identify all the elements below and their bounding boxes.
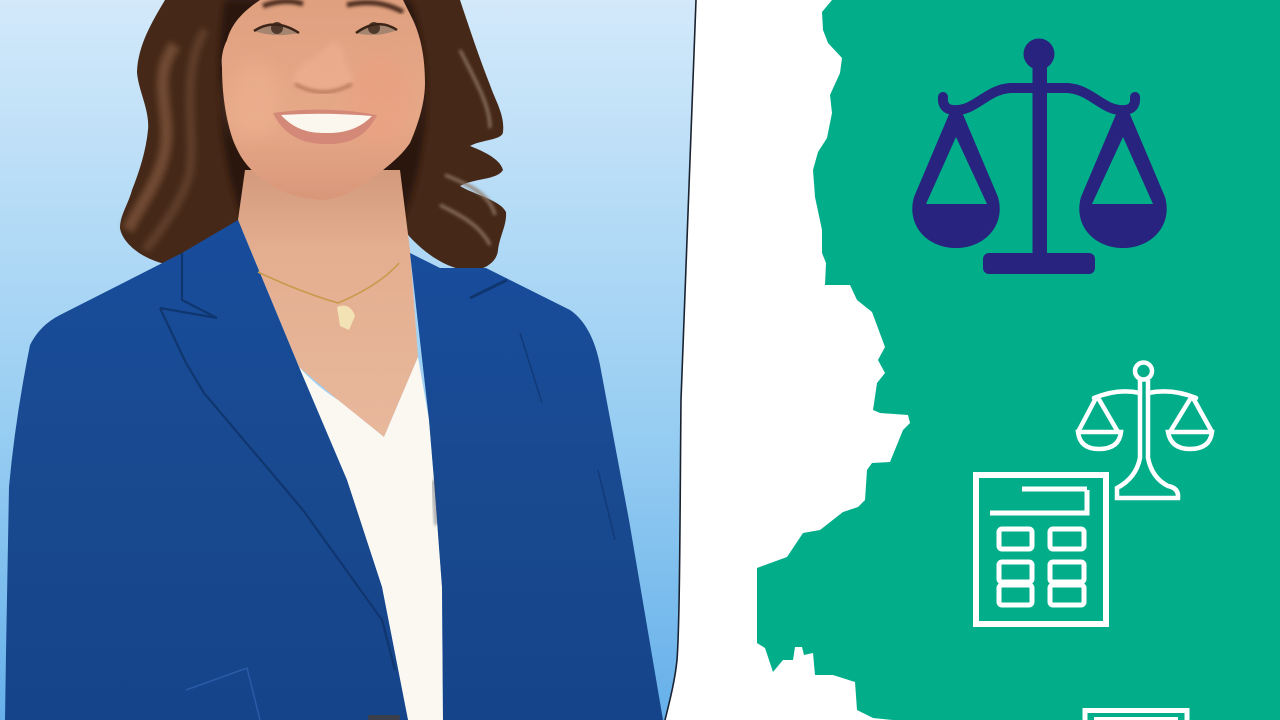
smile <box>273 109 377 144</box>
portrait: woman in blue blazer <box>5 0 663 720</box>
white blouse <box>299 357 443 720</box>
nose <box>293 40 354 92</box>
top ball <box>1024 38 1054 70</box>
hair <box>120 0 506 271</box>
eyes <box>254 22 397 35</box>
pocket <box>186 668 260 720</box>
right lapel lines <box>470 280 507 298</box>
base <box>983 253 1095 274</box>
neck and chest <box>238 170 418 437</box>
icon: white outline calculator <box>976 475 1106 624</box>
cheeks <box>348 55 412 145</box>
centre post <box>1032 65 1047 260</box>
left pan <box>912 112 1000 248</box>
left blazer panel <box>5 220 408 720</box>
icon: navy scales of justice <box>912 38 1167 274</box>
display <box>990 489 1087 513</box>
face <box>222 0 425 200</box>
panel: teal state map <box>757 0 1280 720</box>
eyebrows <box>263 1 403 12</box>
icon: white outline calculator, cropped at bottom <box>1085 710 1187 720</box>
right blazer panel <box>410 253 663 720</box>
blazer button <box>368 715 400 720</box>
right pan <box>1079 112 1167 248</box>
keys <box>999 529 1084 605</box>
left lapel lines <box>160 253 395 670</box>
icon: white outline scales <box>1078 362 1212 498</box>
necklace <box>258 263 399 330</box>
beam <box>943 88 1135 110</box>
inner blouse shadow <box>433 480 436 525</box>
panel: photo background <box>0 0 696 720</box>
calculator frame <box>976 475 1106 624</box>
